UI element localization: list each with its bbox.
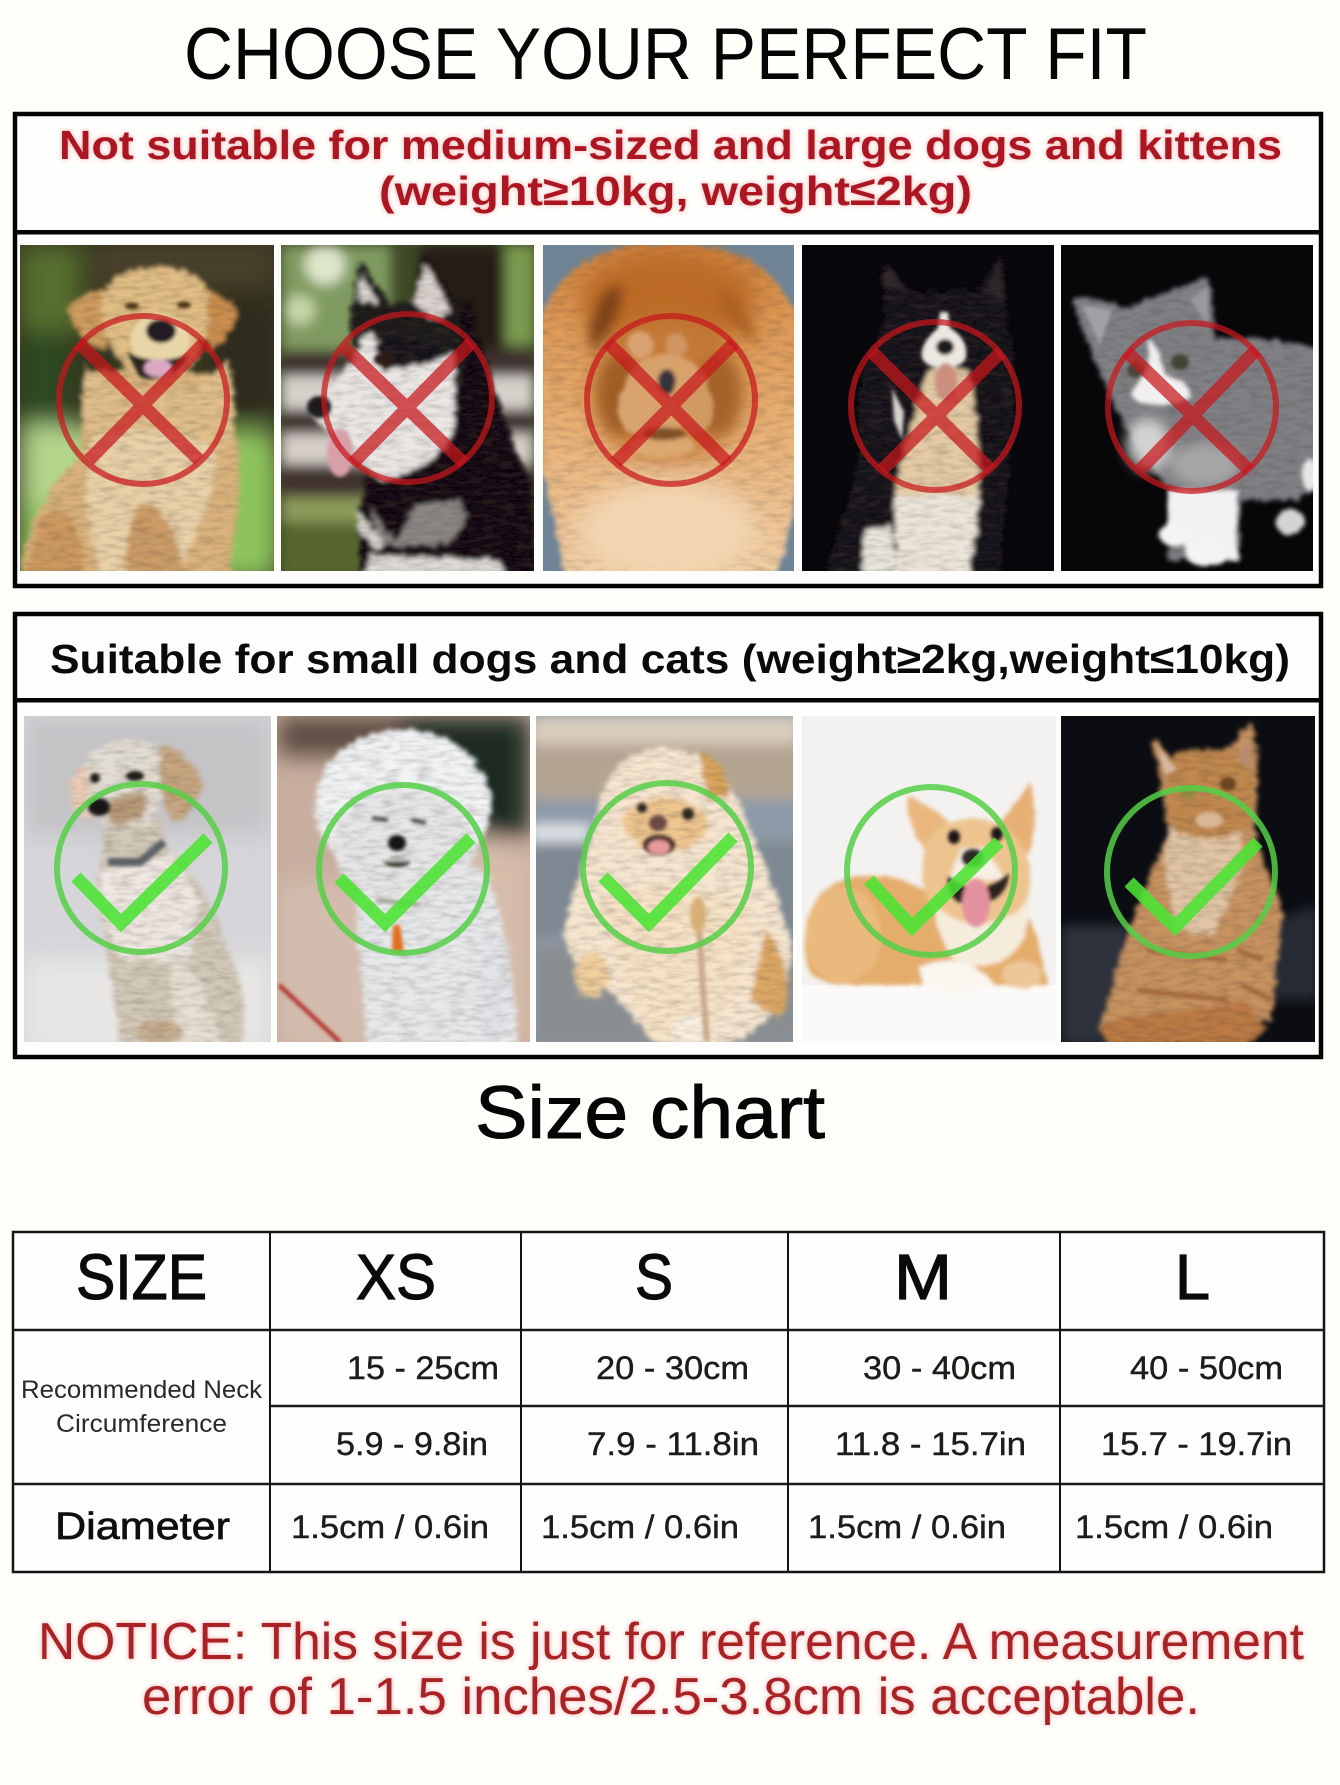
photo: bichon — [277, 716, 530, 1050]
row: diameter values: 1.5cm / 0.6in — [1075, 1509, 1273, 1545]
table header row — [76, 1241, 1210, 1313]
heading: size chart: Size chart — [475, 1071, 825, 1154]
photo: pomeranian — [530, 716, 800, 1046]
photo: husky — [281, 245, 538, 577]
row: neck in inches — [336, 1426, 1292, 1462]
green check 3 — [583, 783, 751, 951]
row: neck in centimetres: 40 - 50cm — [1130, 1350, 1283, 1386]
red cross 4 — [851, 322, 1019, 490]
notice text — [38, 1613, 1305, 1726]
heading: not suitable: (weight≥10kg, weight≤2kg) — [379, 168, 972, 214]
heading: not suitable: Not suitable for medium-sized and large dogs and kittens — [59, 122, 1282, 168]
photo: poodle — [24, 716, 271, 1050]
red cross 5 — [1108, 323, 1276, 491]
row: neck in centimetres: 15 - 25cm — [347, 1350, 499, 1386]
table header row: SIZE — [76, 1241, 207, 1313]
row: diameter values — [291, 1509, 1273, 1545]
heading: not suitable — [59, 122, 1282, 214]
row: diameter values: 1.5cm / 0.6in — [291, 1509, 489, 1545]
photo: border collie — [802, 245, 1055, 575]
red cross 3 — [587, 316, 755, 484]
size table — [13, 1232, 1324, 1572]
row: diameter values: 1.5cm / 0.6in — [541, 1509, 739, 1545]
red cross 2 — [324, 314, 492, 482]
row: neck in centimetres: 20 - 30cm — [596, 1350, 749, 1386]
row: neck in inches: 11.8 - 15.7in — [835, 1426, 1026, 1462]
photo: gray kitten — [1061, 245, 1320, 571]
row: neck in inches: 15.7 - 19.7in — [1101, 1426, 1292, 1462]
panel: suitable — [15, 614, 1321, 1057]
red cross 1 — [59, 316, 227, 484]
row: neck in centimetres: 30 - 40cm — [863, 1350, 1016, 1386]
heading: suitable: Suitable for small dogs and cats (weight≥2kg,weight≤10kg) — [50, 636, 1290, 682]
row: neck in inches: 5.9 - 9.8in — [336, 1426, 488, 1462]
marks: red crossed circles — [59, 314, 1276, 491]
notice text: error of 1-1.5 inches/2.5-3.8cm is acceptable. — [142, 1668, 1200, 1726]
row: neck in inches: 7.9 - 11.8in — [587, 1426, 759, 1462]
notice text: NOTICE: This size is just for reference. A measurement — [38, 1613, 1305, 1671]
row label: recommended neck circumference: Circumference — [56, 1410, 227, 1438]
photo: chow chow — [540, 244, 800, 580]
row label: recommended neck circumference — [21, 1376, 263, 1438]
panel: not suitable — [15, 114, 1321, 586]
table header row: M — [894, 1241, 952, 1313]
photo: golden retriever — [20, 245, 280, 580]
green check 1 — [57, 784, 225, 952]
table header row: XS — [356, 1241, 436, 1313]
title: CHOOSE YOUR PERFECT FIT — [184, 14, 1147, 95]
marks: green check circles — [57, 783, 1275, 956]
green check 5 — [1107, 788, 1275, 956]
row label: recommended neck circumference: Recommended Neck — [21, 1376, 263, 1404]
table header row: L — [1175, 1241, 1210, 1313]
row label: diameter: Diameter — [55, 1506, 230, 1548]
row: diameter values: 1.5cm / 0.6in — [808, 1509, 1006, 1545]
green check 2 — [319, 785, 487, 953]
photo: tabby cat — [1061, 716, 1319, 1045]
row: neck in centimetres — [347, 1350, 1283, 1386]
photo: corgi — [802, 716, 1056, 992]
green check 4 — [847, 787, 1015, 955]
table header row: S — [635, 1241, 673, 1313]
